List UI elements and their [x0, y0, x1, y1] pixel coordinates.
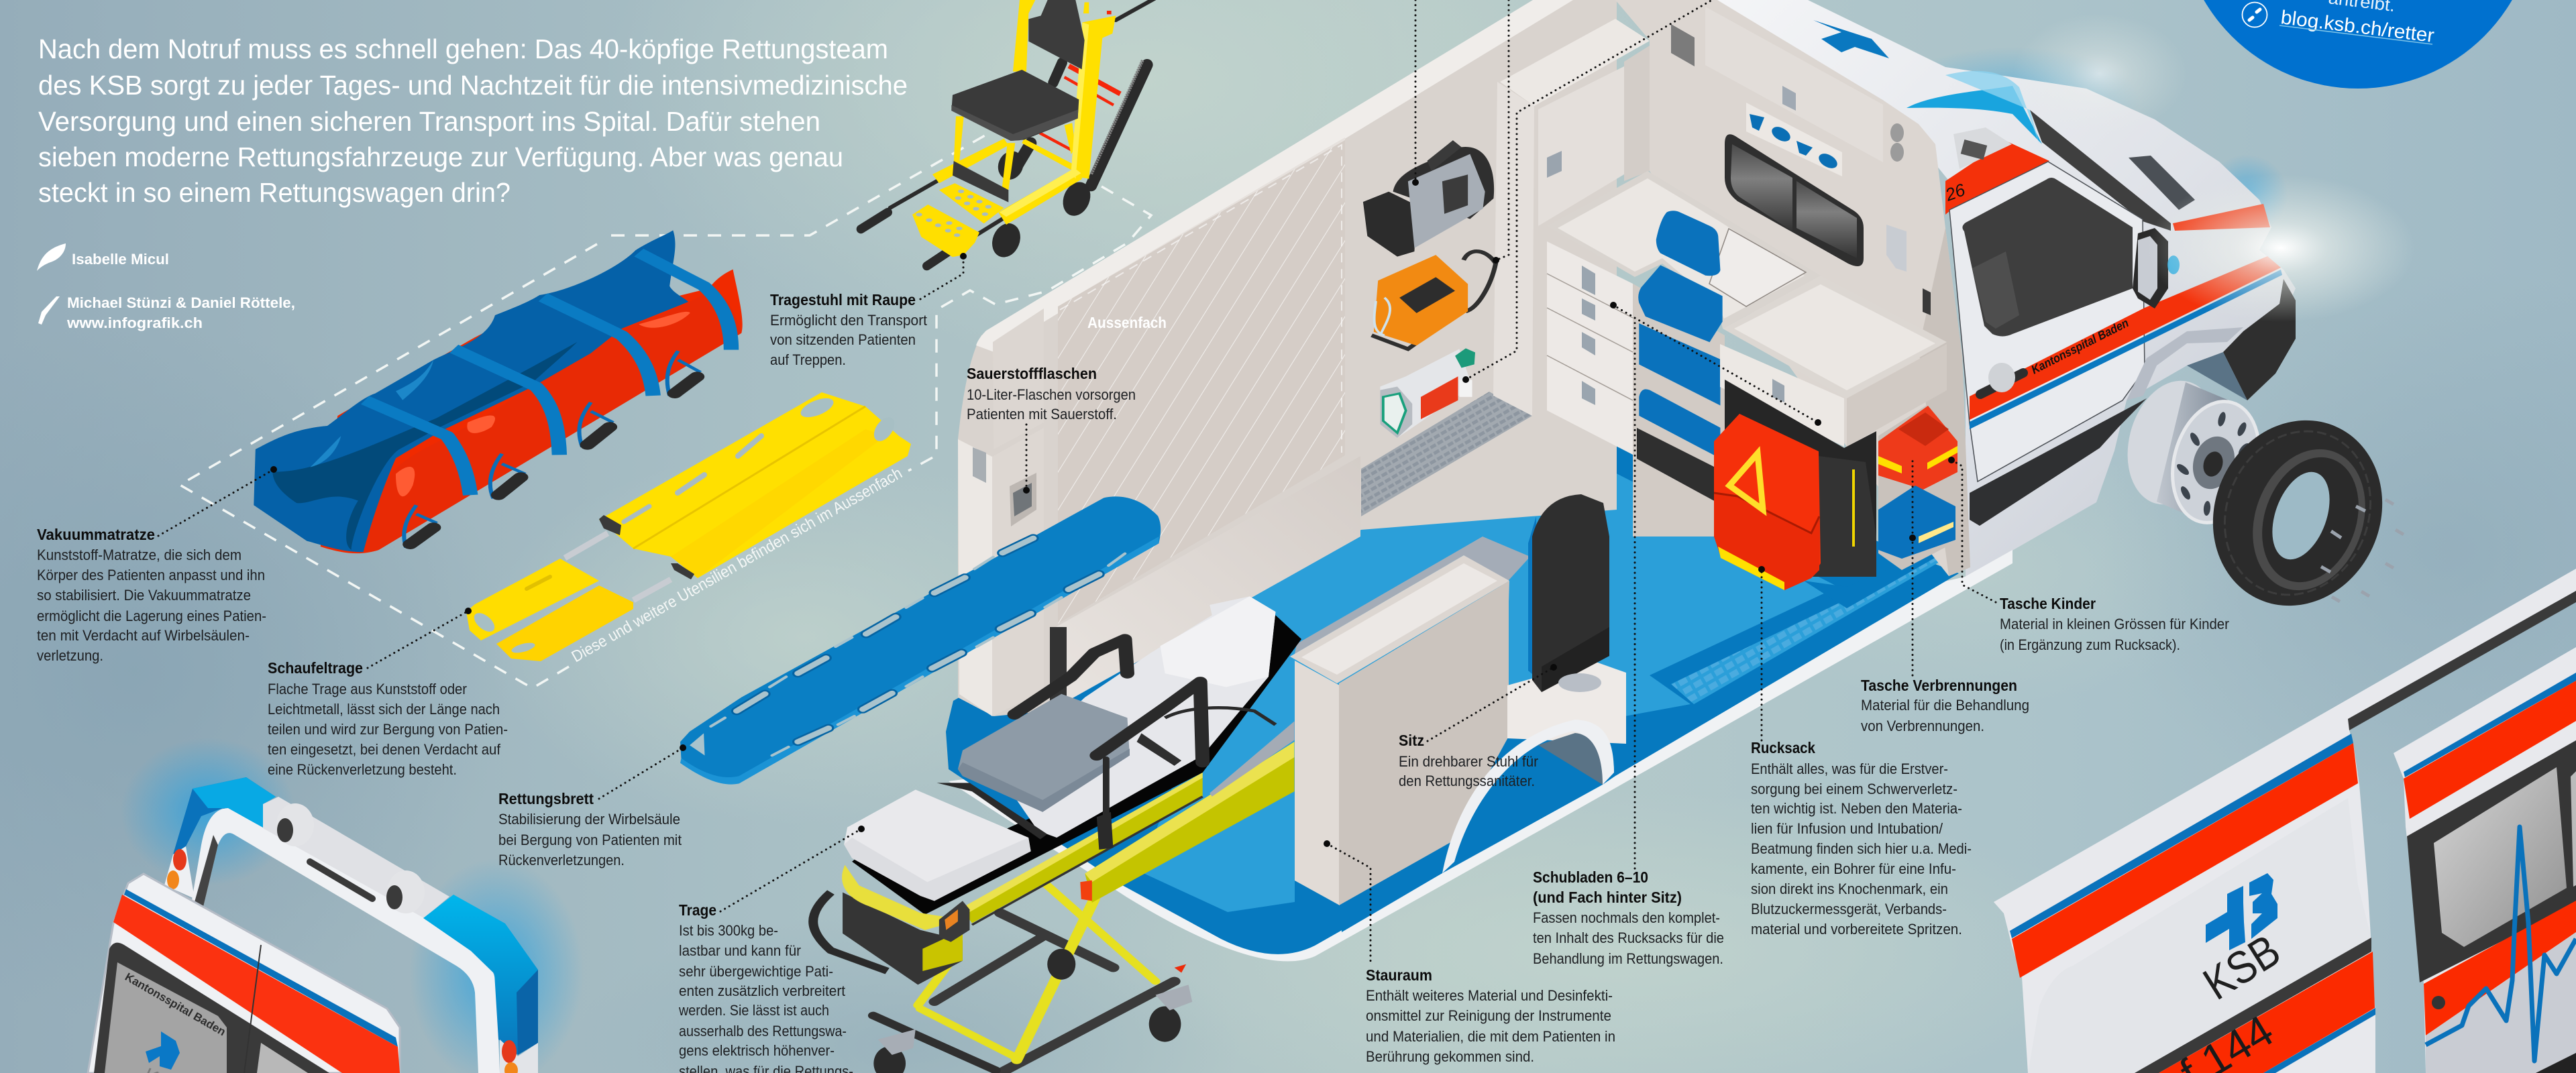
bag: Tasche Kinder — [1878, 406, 1957, 490]
upper cupboard — [1705, 7, 1883, 162]
label: Tasche Verbrennungen: von Verbrennungen. — [1861, 718, 1984, 734]
label: Schubladen: (und Fach hinter Sitz) — [1533, 889, 1682, 906]
tire — [2184, 393, 2412, 633]
rear door right panel — [2394, 647, 2576, 1073]
label: Rettungsbrett: Stabilisierung der Wirbelsäule — [498, 811, 680, 828]
counter right — [1723, 276, 1947, 398]
label: Trage — [678, 901, 853, 1073]
vehicle lettering: rear window: Kantonsspital Baden — [123, 970, 228, 1038]
lights left — [164, 846, 195, 899]
ambulance: side wall and Aussenfach — [958, 0, 1650, 716]
vehicle lettering: cab door: Kantonsspital Baden — [2029, 316, 2131, 377]
tall column — [1493, 82, 1534, 416]
ECG line — [2426, 827, 2576, 1061]
straps — [365, 253, 731, 495]
fender blue light — [2167, 256, 2180, 274]
label: Stauraum: Stauraum — [1366, 966, 1432, 984]
label: Schaufeltrage: Schaufeltrage — [268, 659, 363, 677]
grey blanket — [958, 694, 1130, 812]
label: Rucksack: lien für Infusion und Intubation/ — [1751, 820, 1943, 837]
front wheel arch — [2127, 327, 2243, 400]
yellow frame — [932, 0, 1116, 225]
credit: author: Isabelle Micul — [72, 251, 169, 268]
blue stripe — [1342, 841, 1453, 932]
Trage (stretcher) — [813, 596, 1301, 1073]
label: Tragestuhl mit Raupe: Tragestuhl mit Raupe — [770, 291, 916, 308]
label: Rettungsbrett: Rettungsbrett — [498, 790, 594, 807]
label: Schaufeltrage: eine Rückenverletzung besteht. — [268, 761, 457, 778]
mummy white wrap — [1000, 596, 1275, 838]
footrests — [912, 205, 979, 257]
KSB logo — [2206, 873, 2277, 950]
label: Rucksack: Beatmung finden sich hier u.a. Medi- — [1751, 840, 1972, 857]
ambulance: floor — [946, 410, 2012, 961]
label: Tragestuhl mit Raupe — [770, 291, 928, 368]
label: Schaufeltrage: Flache Trage aus Kunststoff oder — [268, 681, 467, 697]
grate — [1361, 392, 1532, 516]
hook panel — [1746, 103, 1842, 176]
door handle — [1980, 373, 2023, 394]
label: Rucksack: sorgung bei einem Schwerverletz- — [1751, 781, 1957, 797]
label: Aussenfach: Aussenfach — [1087, 314, 1167, 331]
label: Schaufeltrage: teilen und wird zur Bergung von Patien- — [268, 721, 508, 738]
label: Stauraum — [1366, 966, 1615, 1065]
drawers — [1547, 241, 1633, 455]
back counter top — [1547, 171, 1821, 329]
leader end dots — [270, 179, 1955, 847]
bumper dark — [2223, 279, 2296, 400]
black mattress base — [852, 615, 1301, 915]
label: Tasche Kinder — [2000, 595, 2229, 653]
credit: author — [37, 243, 169, 271]
intro text: Versorgung und einen sicheren Transport ins Spital. Dafür stehen — [38, 106, 820, 137]
cabinet top — [1500, 19, 1650, 106]
bottom panel — [2426, 932, 2576, 1073]
label: Rucksack — [1751, 739, 1972, 938]
label: Rucksack: material und vorbereitete Spritzen. — [1751, 921, 1962, 938]
ambulance: rail and rear box — [1290, 494, 1626, 932]
sanitizer — [1886, 225, 1907, 272]
label: Tragestuhl mit Raupe: Ermöglicht den Transport — [770, 312, 928, 329]
black rails — [861, 0, 1156, 266]
dashed outline: Aussenfach utensils — [180, 135, 1151, 688]
dark window frame — [2407, 740, 2576, 982]
illustration: Schaufeltrage — [466, 392, 911, 661]
ambulance: back partition — [1547, 0, 1970, 576]
label: Tasche Verbrennungen — [1861, 677, 2029, 734]
intro text: sieben moderne Rettungsfahrzeuge zur Verfügung. Aber was genau — [38, 142, 843, 172]
label: Tasche Kinder: Tasche Kinder — [2000, 595, 2096, 612]
Rettungsbrett — [680, 496, 1161, 785]
gutter — [2348, 591, 2576, 730]
seat compartment — [1633, 284, 1725, 536]
label: Trage: ausserhalb des Rettungswa- — [679, 1023, 847, 1039]
hatch plate — [1709, 229, 1806, 306]
label: Trage: enten zusätzlich verbreitert — [679, 982, 846, 999]
label: Schubladen: Fassen nochmals den komplet- — [1533, 909, 1720, 926]
blue seat — [1638, 211, 1723, 459]
sauerstoff outlet — [1010, 473, 1036, 526]
label: Sitz: Sitz — [1399, 732, 1424, 749]
foot crossbar — [953, 161, 1008, 203]
vehicle lettering: cab number: 26 — [1942, 179, 1968, 205]
link text: blog.ksb.ch/retter — [2279, 7, 2436, 47]
upper red band — [2404, 681, 2576, 819]
casters — [873, 949, 1181, 1073]
label: Rucksack: Rucksack — [1751, 739, 1815, 756]
seat back — [1528, 516, 1536, 677]
illustration: Tragestuhl mit Raupe — [861, 0, 1156, 266]
seat — [951, 70, 1079, 141]
label: Vakuummatratze: verletzung. — [37, 647, 103, 664]
label: Vakuummatratze: ermöglicht die Lagerung eines Patien- — [37, 608, 266, 624]
upper red band — [1945, 141, 2049, 215]
dark window frame — [94, 943, 329, 1073]
rear door left panel — [1994, 569, 2576, 1073]
label: Rettungsbrett — [498, 790, 682, 868]
hood red stripe — [2173, 204, 2270, 231]
label: Schaufeltrage: ten eingesetzt, bei denen Verdacht auf — [268, 741, 501, 758]
illustration: Vakuummatratze — [254, 230, 743, 553]
label: Rucksack: kamente, ein Bohrer für eine Infu- — [1751, 860, 1956, 877]
ledge — [1050, 456, 1360, 711]
dark a-pillar — [2030, 110, 2171, 231]
blue stripe — [1970, 270, 2282, 429]
label: Vakuummatratze — [37, 526, 266, 664]
inner rail — [963, 773, 1203, 923]
cab body shell — [1714, 0, 2296, 577]
door red band — [1970, 256, 2281, 420]
label: Schaufeltrage — [268, 659, 508, 778]
red band — [2012, 743, 2358, 978]
label: Trage: Ist bis 300kg be- — [679, 922, 778, 939]
blue info circle — [2180, 0, 2536, 89]
control box — [939, 901, 969, 942]
label: Schubladen: Behandlung im Rettungswagen. — [1533, 950, 1723, 967]
label: Tragestuhl mit Raupe: auf Treppen. — [770, 351, 846, 368]
ambulance rear view — [88, 738, 584, 1073]
lower stripes — [2135, 938, 2371, 1073]
label: Vakuummatratze: Kunststoff-Matratze, die sich dem — [37, 547, 241, 563]
mirror bracket triangle — [1953, 127, 2012, 169]
label: Tasche Verbrennungen: Material für die Behandlung — [1861, 697, 2029, 714]
label: Stauraum: Berührung gekommen sind. — [1366, 1048, 1534, 1065]
label: Rucksack: Blutzuckermessgerät, Verbands- — [1751, 901, 1947, 917]
dark sill — [1970, 398, 2147, 526]
label: Schubladen — [1533, 868, 1724, 967]
label: Tasche Kinder: (in Ergänzung zum Rucksack). — [2000, 636, 2180, 653]
second window — [257, 1043, 308, 1073]
grey window — [105, 962, 227, 1073]
blue beacon — [1907, 86, 2042, 144]
equipment: defibrillator — [1363, 140, 1494, 257]
label: Vakuummatratze: ten mit Verdacht auf Wirbelsäulen- — [37, 627, 250, 644]
label: Stauraum: und Materialien, die mit dem Patienten in — [1366, 1028, 1615, 1045]
intro text: des KSB sorgt zu jeder Tages- und Nachtzeit für die intensivmedizinische — [38, 70, 908, 101]
rim — [2114, 371, 2230, 514]
intro text — [38, 34, 908, 208]
label: Tasche Verbrennungen: Tasche Verbrennungen — [1861, 677, 2017, 694]
label: Trage: lastbar und kann für — [679, 942, 801, 959]
door outline — [1949, 162, 2145, 482]
window — [2434, 767, 2567, 947]
ambulance: cabin exterior — [1714, 0, 2415, 633]
backrest — [1028, 0, 1085, 69]
upper blue stripe — [2404, 673, 2576, 777]
foot bumper — [842, 865, 963, 930]
mirror — [2133, 228, 2168, 308]
left beacon — [173, 777, 276, 854]
credit: illustrators: www.infografik.ch — [66, 315, 203, 331]
switch panel — [1923, 288, 1931, 315]
sitz base — [1507, 661, 1626, 744]
link icon — [2242, 3, 2267, 27]
blue stripe — [124, 889, 398, 1047]
window — [1725, 134, 1864, 266]
label: Vakuummatratze: so stabilisiert. Die Vakuummatratze — [37, 587, 251, 604]
floor grating — [1671, 550, 1949, 704]
equipment: suction unit — [1380, 348, 1475, 438]
label: Sauerstoffflaschen — [967, 365, 1136, 422]
arms — [1014, 639, 1203, 838]
hood vent — [2129, 156, 2195, 210]
rear shell — [88, 874, 400, 1073]
blue stripe — [2010, 734, 2353, 938]
white frame — [192, 808, 500, 1073]
bag compartment — [1725, 380, 1876, 543]
red band — [113, 895, 400, 1073]
main rails — [1085, 742, 1294, 903]
centre fixture — [263, 797, 449, 918]
label: Sitz — [1399, 732, 1538, 789]
lamps — [276, 803, 425, 913]
wheel arch — [1442, 720, 1614, 873]
bolts — [2321, 500, 2404, 602]
bag: rucksack — [1714, 414, 1876, 590]
handles — [404, 351, 700, 548]
foot mattress — [844, 790, 1031, 901]
label: Sauerstoffflaschen: Patienten mit Sauerstoff. — [967, 406, 1117, 422]
label: dashed area caption: Diese und weitere Utensilien befinden sich im Aussenfach — [569, 464, 906, 666]
roof star — [1813, 20, 1889, 58]
straps — [936, 783, 1047, 840]
battery box — [843, 893, 963, 984]
label: Sitz: den Rettungssanitäter. — [1399, 773, 1535, 789]
lower red band — [2424, 901, 2576, 1035]
label: Sauerstoffflaschen: 10-Liter-Flaschen vorsorgen — [967, 386, 1136, 403]
credit: illustrators — [38, 294, 295, 331]
label: Sitz: Ein drehbarer Stuhl für — [1399, 753, 1538, 770]
vehicle lettering: rear door KSB: KSB — [2195, 925, 2289, 1010]
label: Trage: sehr übergewichtige Pati- — [679, 963, 833, 980]
label: Rucksack: Enthält alles, was für die Erstver- — [1751, 760, 1948, 777]
label: Vakuummatratze: Körper des Patienten anpasst und ihn — [37, 567, 265, 583]
right beacon — [423, 895, 538, 1055]
label: Trage: Trage — [679, 901, 716, 919]
white top edge — [976, 0, 1573, 352]
bag: Tasche Verbrennungen — [1878, 486, 1955, 559]
equipment: ventilator orange — [1372, 251, 1496, 349]
label: Tragestuhl mit Raupe: von sitzenden Patienten — [770, 331, 916, 348]
label: Stauraum: Enthält weiteres Material und Desinfekti- — [1366, 987, 1613, 1004]
label: Rucksack: ten wichtig ist. Neben den Materia- — [1751, 800, 1962, 817]
side window — [1962, 178, 2133, 337]
step under bags — [1804, 536, 1949, 608]
panel: Aussenfach hatched — [1058, 140, 1345, 624]
leader lines — [158, 0, 1996, 966]
label: Rucksack: sion direkt ins Knochenmark, ein — [1751, 881, 1948, 897]
label: Schubladen: ten Inhalt des Rucksacks für die — [1533, 929, 1724, 946]
label: Rettungsbrett: Rückenverletzungen. — [498, 852, 625, 868]
air vents — [1890, 123, 1904, 142]
label: Schaufeltrage: Leichtmetall, lässt sich der Länge nach — [268, 701, 500, 718]
label: Sauerstoffflaschen: Sauerstoffflaschen — [967, 365, 1097, 382]
undercarriage — [873, 885, 1175, 1073]
label: Trage: werden. Sie lässt ist auch — [678, 1002, 829, 1019]
label: Rettungsbrett: bei Bergung von Patienten mit — [498, 832, 682, 848]
label: Tasche Kinder: Material in kleinen Grössen für Kinder — [2000, 616, 2229, 632]
Stauraum box — [1290, 555, 1509, 683]
label: Vakuummatratze: Vakuummatratze — [37, 526, 155, 543]
intro text: steckt in so einem Rettungswagen drin? — [38, 177, 511, 208]
wheels — [987, 148, 1095, 262]
inner rim — [1058, 137, 1345, 315]
label: Stauraum: onsmittel zur Reinigung der Instrumente — [1366, 1007, 1611, 1024]
headlight glow — [2147, 174, 2415, 322]
rear left pillar — [958, 439, 992, 716]
label: Trage: gens elektrisch höhenver- — [679, 1042, 835, 1059]
intro text: Nach dem Notruf muss es schnell gehen: Das 40-köpfige Rettungsteam — [38, 34, 888, 64]
KSB logo rear — [146, 1031, 180, 1070]
red bars — [1040, 66, 1120, 150]
lights right — [500, 1039, 538, 1073]
cabinet door — [1538, 66, 1624, 226]
credit: illustrators: Michael Stünzi & Daniel Röttele, — [67, 294, 295, 311]
label: Schubladen: Schubladen 6–10 — [1533, 868, 1648, 886]
